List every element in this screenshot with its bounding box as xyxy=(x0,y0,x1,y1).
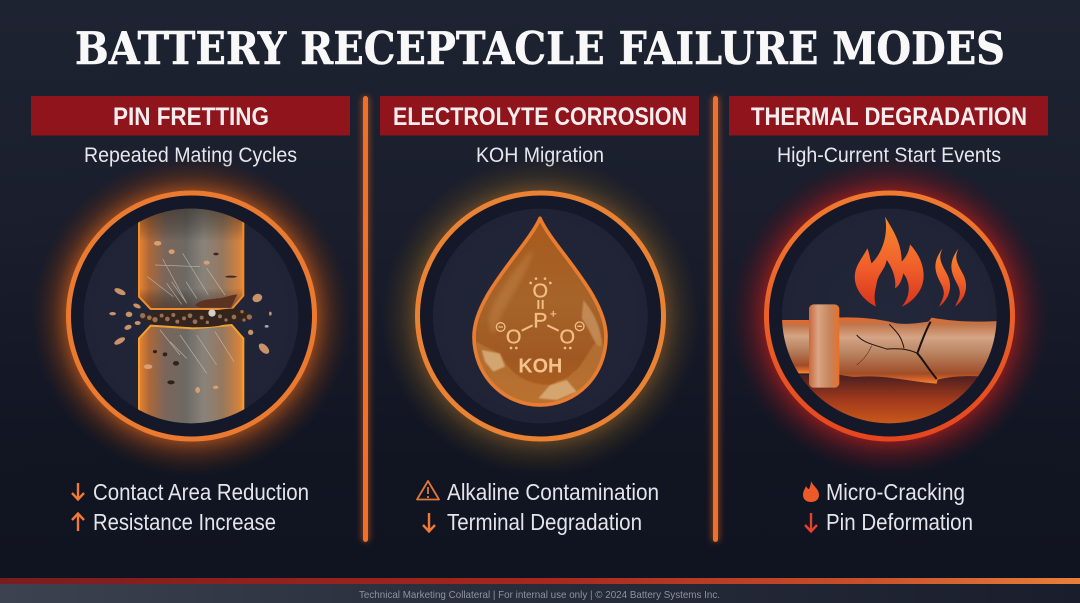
icon: fretted pin contact xyxy=(32,156,352,476)
subtitle: high-current start events: High-Current Start Events xyxy=(777,144,1001,167)
droplet xyxy=(473,218,607,412)
icon: cracked copper pin with flame xyxy=(730,156,1050,476)
divider right xyxy=(711,96,720,542)
molecule labels: KOH xyxy=(518,356,562,378)
bullet: alkaline contamination: Alkaline Contamination xyxy=(447,479,659,505)
bullet: pin deformation: Pin Deformation xyxy=(826,509,973,535)
cracks xyxy=(857,322,937,379)
molecule labels: + xyxy=(550,309,557,321)
debris xyxy=(109,287,272,356)
upper pin xyxy=(139,205,243,309)
collar xyxy=(809,304,839,388)
bullet: terminal degradation: Terminal Degradation xyxy=(447,509,642,535)
bullet: contact area reduction: Contact Area Reduction xyxy=(93,479,309,505)
molecule labels: O xyxy=(560,327,575,349)
bullet: resistance increase: Resistance Increase xyxy=(93,509,276,535)
panel: thermal degradation xyxy=(729,96,1050,535)
molecule labels: P xyxy=(533,309,547,333)
divider left xyxy=(361,96,370,542)
lower pin xyxy=(139,325,243,428)
panel: pin fretting xyxy=(31,96,352,535)
heading: electrolyte corrosion: ELECTROLYTE CORROSION xyxy=(393,103,687,131)
footer bar xyxy=(0,578,1080,603)
subtitle: KOH migration: KOH Migration xyxy=(476,144,604,167)
subtitle: repeated mating cycles: Repeated Mating Cycles xyxy=(84,144,297,167)
flame xyxy=(855,217,924,307)
panel: electrolyte corrosion xyxy=(380,96,700,535)
heading: thermal degradation: THERMAL DEGRADATION xyxy=(751,103,1027,131)
heading: thermal degradation xyxy=(729,96,1048,136)
heat waves xyxy=(935,248,966,307)
heading: electrolyte corrosion xyxy=(380,96,699,136)
bullet: micro-cracking: Micro-Cracking xyxy=(826,479,965,505)
molecule labels: O xyxy=(533,281,548,303)
molecule labels xyxy=(496,277,584,378)
heading: pin fretting: PIN FRETTING xyxy=(113,103,269,131)
footer text: Technical Marketing Collateral | For internal use only | © 2024 Battery Systems Inc. xyxy=(359,589,720,601)
icon: KOH droplet xyxy=(380,156,700,476)
heading: pin fretting xyxy=(31,96,350,136)
molecule labels: O xyxy=(506,327,521,349)
